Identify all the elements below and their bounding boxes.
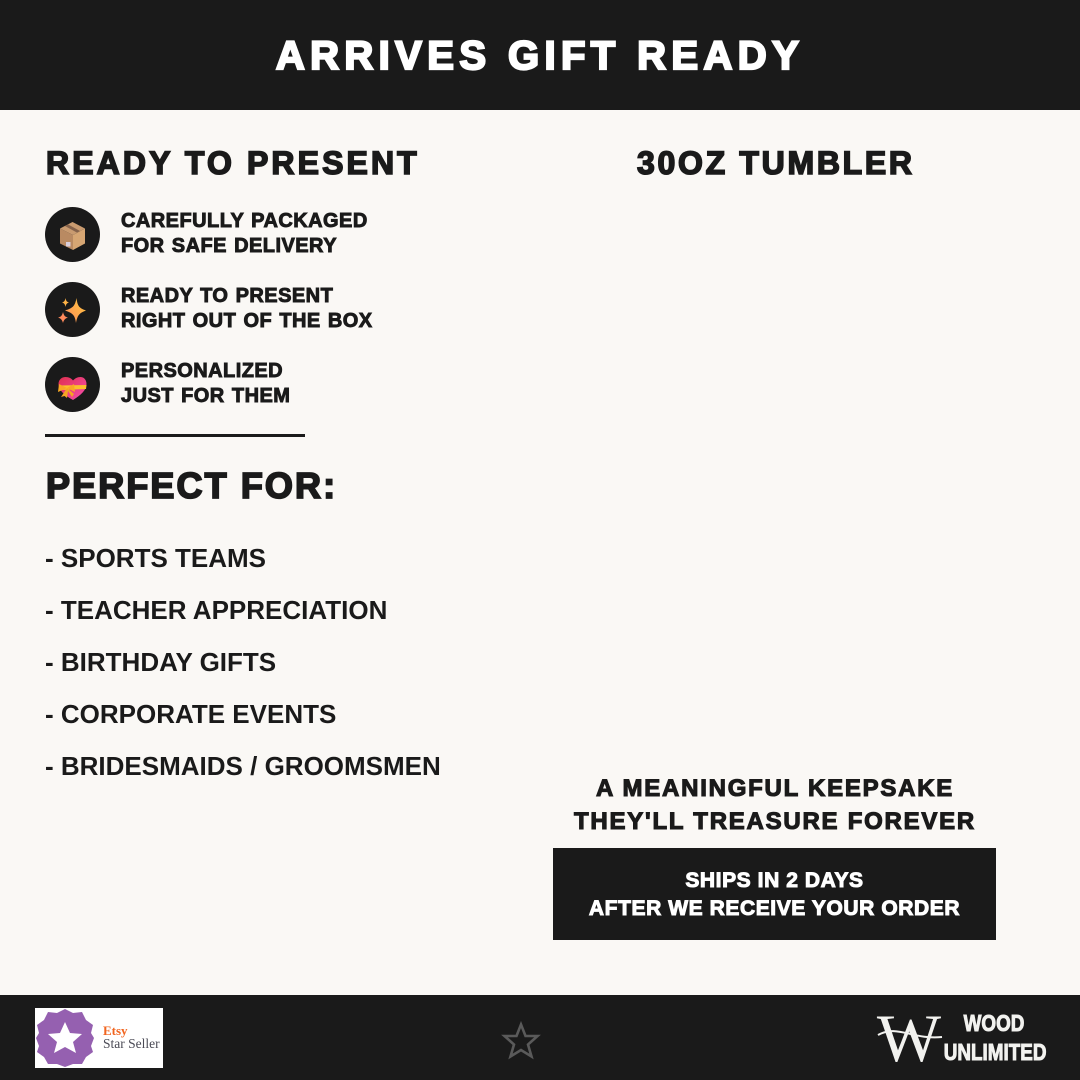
feature text: ready: RIGHT OUT OF THE BOX — [121, 310, 373, 332]
badge: etsy star seller: Etsy — [103, 1023, 128, 1038]
icon: star outline — [501, 1021, 541, 1060]
title: ARRIVES GIFT READY — [276, 34, 804, 78]
feature text: ready — [121, 285, 373, 332]
list: perfect for: - TEACHER APPRECIATION — [45, 595, 387, 625]
list: perfect for — [45, 543, 441, 781]
list: perfect for: - BIRTHDAY GIFTS — [45, 647, 276, 677]
feature text: personalized: JUST FOR THEM — [121, 385, 290, 407]
shipping callout: SHIPS IN 2 DAYS — [685, 869, 864, 892]
heading: perfect for: PERFECT FOR: — [46, 465, 337, 506]
footer band — [0, 995, 1080, 1080]
shipping callout — [553, 848, 996, 940]
list: perfect for: - CORPORATE EVENTS — [45, 699, 336, 729]
logo: wood unlimited — [876, 1010, 1046, 1066]
feature text: personalized — [120, 360, 290, 407]
tagline: A MEANINGFUL KEEPSAKE — [596, 775, 954, 802]
feature text: packaged: FOR SAFE DELIVERY — [121, 235, 337, 257]
logo: wood unlimited: WOOD — [964, 1010, 1024, 1036]
tagline — [574, 775, 976, 835]
feature text: ready: READY TO PRESENT — [121, 285, 333, 307]
heading: 30oz tumbler: 30OZ TUMBLER — [637, 145, 915, 181]
list: perfect for: - BRIDESMAIDS / GROOMSMEN — [45, 751, 441, 781]
icon: sparkles — [45, 282, 100, 337]
feature text: packaged — [121, 210, 368, 257]
shipping callout: AFTER WE RECEIVE YOUR ORDER — [589, 897, 960, 920]
feature text: packaged: CAREFULLY PACKAGED — [121, 210, 368, 232]
divider — [45, 434, 305, 437]
icon: heart with ribbon — [45, 357, 100, 412]
tagline: THEY'LL TREASURE FOREVER — [574, 808, 976, 835]
heading: ready to present: READY TO PRESENT — [46, 145, 420, 181]
feature text: personalized: PERSONALIZED — [121, 360, 283, 382]
logo: wood unlimited: UNLIMITED — [944, 1039, 1046, 1065]
icon: package — [45, 207, 100, 262]
list: perfect for: - SPORTS TEAMS — [45, 543, 266, 573]
header band — [0, 0, 1080, 110]
badge: etsy star seller: Star Seller — [103, 1036, 160, 1051]
badge: etsy star seller — [35, 1008, 163, 1068]
logo text — [944, 1010, 1046, 1065]
